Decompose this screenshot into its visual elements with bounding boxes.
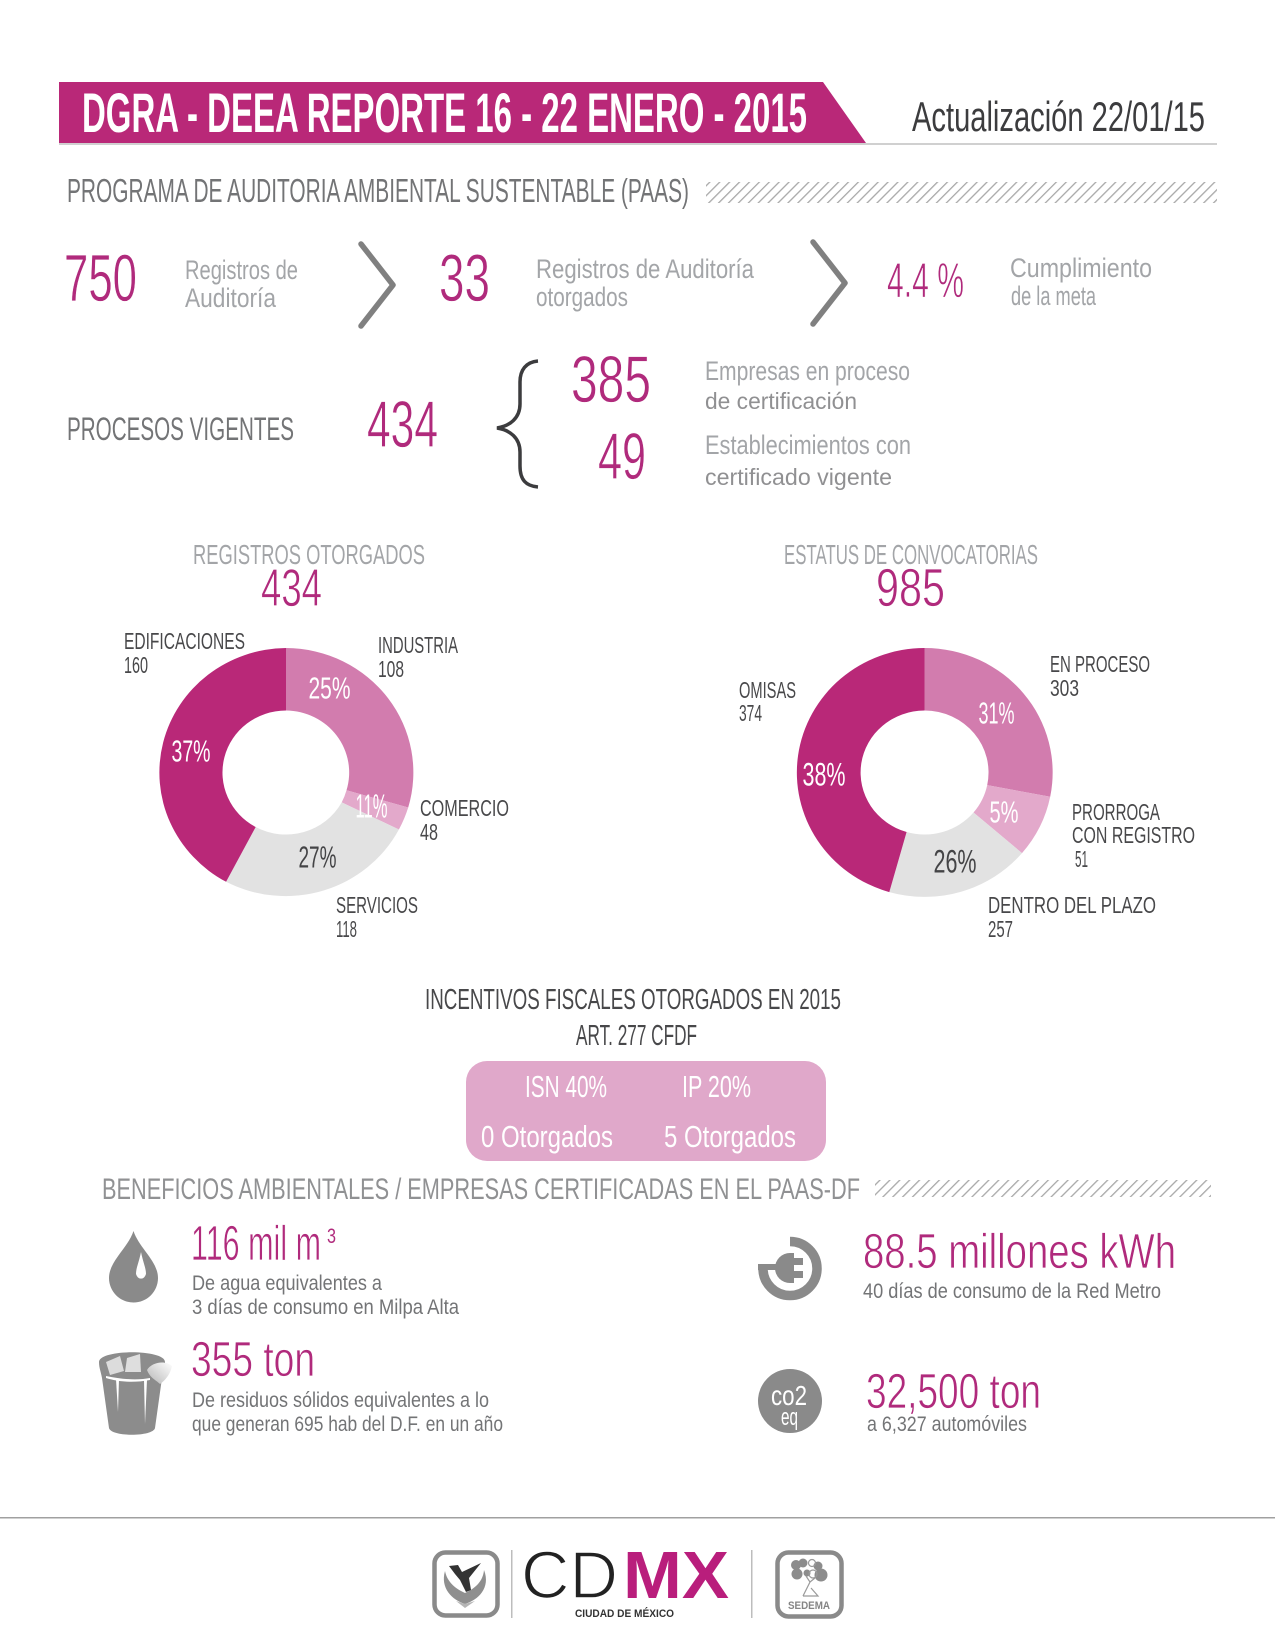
procesos vigentes: PROCESOS VIGENTES <box>67 411 294 447</box>
stat: cumplimiento de la meta: 4.4 % <box>887 254 964 308</box>
panel: incentivos box <box>466 1061 826 1161</box>
breakdown: 49: Establecimientos con <box>705 430 911 460</box>
stat: registros otorgados <box>439 241 755 316</box>
chart heading <box>193 539 425 618</box>
procesos vigentes <box>67 342 911 493</box>
label: industria <box>378 632 458 682</box>
panel: incentivos box: 5 Otorgados <box>664 1119 796 1154</box>
label: servicios: SERVICIOS <box>336 892 418 918</box>
logo: CDMX <box>521 1538 729 1620</box>
donut chart: convocatorias: 38% <box>802 756 846 792</box>
stat: registros de auditoría: Auditoría <box>185 283 277 313</box>
header banner <box>59 81 1217 145</box>
procesos vigentes: 434 <box>367 387 438 461</box>
label: industria: INDUSTRIA <box>378 632 458 658</box>
breakdown: 49: certificado vigente <box>705 464 892 490</box>
chart heading: 434 <box>261 559 322 618</box>
panel: incentivos box: ISN 40% <box>525 1069 607 1104</box>
icon: co2 badge: eq <box>781 1404 798 1431</box>
label: omisas: 374 <box>739 700 762 726</box>
icon: water drop <box>109 1231 158 1302</box>
breakdown: 385: 385 <box>571 342 651 416</box>
donut chart: registros: 37% <box>172 734 210 768</box>
benefit: co2 <box>758 1365 1041 1436</box>
icon: trash bin <box>99 1352 172 1435</box>
stat: cumplimiento de la meta: Cumplimiento <box>1010 253 1152 283</box>
icon: co2 badge: co2 <box>771 1380 807 1411</box>
logo: CDMX: CIUDAD DE MÉXICO <box>575 1607 674 1620</box>
donut chart: registros: 25% <box>308 670 350 706</box>
breakdown: 385: de certificación <box>705 388 857 414</box>
label: comercio <box>420 795 509 845</box>
heading: incentivos fiscales <box>425 984 841 1052</box>
label: comercio: 48 <box>420 819 438 845</box>
label: en proceso <box>1050 651 1150 701</box>
logo: SEDEMA badge: SEDEMA <box>788 1600 830 1612</box>
stat: registros de auditoría: Registros de <box>185 255 298 285</box>
panel: incentivos box: IP 20% <box>682 1069 751 1104</box>
label: industria: 108 <box>378 656 404 682</box>
label: en proceso: EN PROCESO <box>1050 651 1150 677</box>
arrow: chevron 2 <box>813 242 845 324</box>
donut chart: registros: 11% <box>356 788 388 824</box>
donut chart: convocatorias: 5% <box>990 794 1018 830</box>
label: omisas <box>739 677 796 726</box>
stat: cumplimiento de la meta <box>887 253 1152 311</box>
label: edificaciones: 160 <box>124 652 148 678</box>
stat: registros otorgados: Registros de Auditoría <box>536 254 755 284</box>
icon: co2 badge <box>758 1369 822 1433</box>
benefit: co2: 32,500 ton <box>866 1365 1041 1419</box>
benefit: residuos: que generan 695 hab del D.F. en un año <box>192 1413 503 1436</box>
label: comercio: COMERCIO <box>420 795 509 821</box>
stat: cumplimiento de la meta: de la meta <box>1011 281 1097 311</box>
panel: estatus de convocatorias <box>739 539 1195 942</box>
section heading: PAAS: PROGRAMA DE AUDITORIA AMBIENTAL SUSTENTABLE (PAAS) <box>67 172 689 209</box>
benefit: agua <box>109 1217 459 1319</box>
label: prórroga con registro: CON REGISTRO <box>1072 822 1195 848</box>
stat: registros otorgados: 33 <box>439 241 490 316</box>
donut chart: registros <box>159 648 413 896</box>
footer logos <box>434 1538 842 1620</box>
label: edificaciones <box>124 628 245 678</box>
donut chart: convocatorias <box>797 648 1053 897</box>
breakdown: 385: Empresas en proceso <box>705 356 910 386</box>
stat: registros de auditoría: 750 <box>64 241 137 316</box>
label: dentro del plazo <box>988 892 1156 942</box>
donut chart: registros: 27% <box>298 840 336 874</box>
chart heading: 985 <box>876 558 945 618</box>
benefit: agua: 3 <box>327 1225 336 1248</box>
stat: registros otorgados: otorgados <box>536 282 628 312</box>
label: omisas: OMISAS <box>739 677 796 703</box>
chart heading: REGISTROS OTORGADOS <box>193 539 425 570</box>
label: dentro del plazo: 257 <box>988 916 1013 942</box>
benefit: agua: 3 días de consumo en Milpa Alta <box>192 1296 459 1319</box>
heading: incentivos fiscales: ART. 277 CFDF <box>576 1020 697 1052</box>
breakdown: 49: 49 <box>598 419 646 493</box>
brace <box>497 361 538 487</box>
label: prórroga con registro: PRORROGA <box>1072 799 1160 825</box>
label: dentro del plazo: DENTRO DEL PLAZO <box>988 892 1156 918</box>
logo: CDMX: MX <box>623 1538 729 1613</box>
benefit: agua: De agua equivalentes a <box>192 1272 382 1295</box>
chart heading: ESTATUS DE CONVOCATORIAS <box>784 539 1038 570</box>
label: en proceso: 303 <box>1050 675 1079 701</box>
benefit: residuos: 355 ton <box>191 1333 315 1387</box>
arrow: chevron 1 <box>361 244 393 326</box>
benefit: energía: 88.5 millones kWh <box>863 1225 1176 1279</box>
benefit: agua: 116 mil m <box>191 1217 321 1271</box>
panel: incentivos box: 0 Otorgados <box>481 1119 613 1154</box>
section heading: beneficios ambientales: BENEFICIOS AMBIENTALES / EMPRESAS CERTIFICADAS EN EL PAAS-DF <box>102 1173 860 1206</box>
benefit: residuos <box>99 1333 503 1436</box>
panel: registros otorgados <box>124 539 509 942</box>
logo: angel badge <box>434 1552 498 1616</box>
label: prórroga con registro: 51 <box>1075 846 1088 872</box>
benefit: co2: a 6,327 automóviles <box>867 1413 1027 1436</box>
donut chart: convocatorias: 31% <box>978 696 1014 730</box>
logo: CDMX: CD <box>521 1538 618 1613</box>
benefit: energía <box>758 1225 1176 1303</box>
chart heading <box>784 539 1038 618</box>
label: servicios <box>336 892 418 942</box>
stat: registros de auditoría <box>64 241 298 316</box>
icon: plug <box>758 1242 817 1296</box>
donut chart: convocatorias: 26% <box>934 844 976 880</box>
breakdown: 49 <box>598 419 911 493</box>
label: edificaciones: EDIFICACIONES <box>124 628 245 654</box>
logo: SEDEMA badge <box>778 1552 842 1616</box>
benefit: residuos: De residuos sólidos equivalentes a lo <box>192 1389 489 1412</box>
heading: incentivos fiscales: INCENTIVOS FISCALES OTORGADOS EN 2015 <box>425 984 841 1016</box>
label: prórroga con registro <box>1072 799 1195 872</box>
breakdown: 385 <box>571 342 910 416</box>
benefit: energía: 40 días de consumo de la Red Metro <box>863 1280 1161 1303</box>
label: servicios: 118 <box>336 916 357 942</box>
